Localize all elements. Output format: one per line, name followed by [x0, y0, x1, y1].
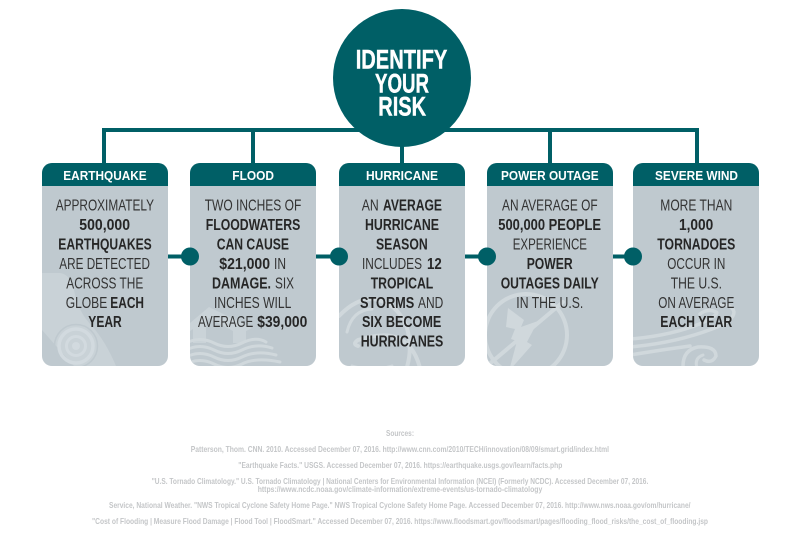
- sources: "U.S. Tornado Climatology." U.S. Tornado Climatology | National Centers for Environmental Information (NCEI) (Formerly NCDC). Accessed December 07, 2016.: [152, 476, 648, 486]
- icon: wind gusts: [630, 305, 734, 368]
- header: power outage: POWER OUTAGE: [501, 169, 599, 183]
- text: earthquake fact: EARTHQUAKES: [58, 237, 152, 254]
- text: hurricane fact: SEASON: [376, 237, 428, 254]
- text: flood fact: TWO INCHES OF: [205, 198, 301, 215]
- sources: Patterson, Thom. CNN. 2010. Accessed December 07, 2016. http://www.cnn.com/2010/TECH/innovation/08/09/smart.grid/index.html: [191, 444, 609, 454]
- text: flood fact: INCHES WILL: [214, 295, 291, 312]
- text: flood fact: SIX: [275, 275, 294, 292]
- text: severe wind fact: [657, 198, 736, 331]
- text: hurricane fact: AND: [418, 295, 443, 312]
- text: earthquake fact: APPROXIMATELY: [56, 198, 154, 215]
- header: hurricane: HURRICANE: [366, 169, 438, 183]
- text: severe wind fact: THE U.S.: [671, 275, 722, 292]
- icon: earthquake rings: [42, 273, 116, 368]
- header: severe wind: SEVERE WIND: [655, 169, 738, 183]
- text: hurricane fact: HURRICANE: [365, 217, 439, 234]
- text: earthquake fact: GLOBE: [66, 295, 107, 312]
- text: severe wind fact: OCCUR IN: [667, 256, 725, 273]
- icon: hurricane swirl: [339, 299, 420, 370]
- text: hurricane fact: [360, 198, 444, 351]
- icon: lightning in crossed circle: [485, 294, 567, 376]
- text: hurricane fact: HURRICANES: [361, 334, 444, 351]
- text: power outage fact: AN AVERAGE OF: [502, 198, 598, 215]
- icon: flooded house: [186, 307, 280, 368]
- header: severe wind: [633, 163, 759, 186]
- text: hurricane fact: STORMS: [360, 295, 415, 312]
- header: earthquake: [42, 163, 168, 186]
- org chart connector lines: [102, 128, 699, 164]
- sources: "Earthquake Facts." USGS. Accessed December 07, 2016. https://earthquake.usgs.gov/learn/facts.php: [238, 460, 562, 470]
- text: earthquake fact: [56, 198, 154, 331]
- text: severe wind fact: 1,000: [679, 217, 713, 234]
- header: hurricane: [339, 163, 465, 186]
- text: hurricane fact: TROPICAL: [371, 275, 433, 292]
- text: flood fact: [198, 198, 307, 331]
- text: earthquake fact: EACH: [110, 295, 144, 312]
- panel connectors with dots: [168, 248, 642, 266]
- text: hurricane fact: AVERAGE: [383, 198, 442, 215]
- text: severe wind fact: ON AVERAGE: [658, 295, 734, 312]
- panel: severe wind: [630, 163, 759, 368]
- text: hurricane fact: AN: [362, 198, 379, 215]
- title circle: IDENTIFY: [356, 44, 448, 74]
- text: flood fact: DAMAGE.: [212, 275, 271, 292]
- text: power outage fact: [498, 198, 601, 312]
- text: hurricane fact: 12: [427, 256, 442, 273]
- title circle: [333, 9, 471, 147]
- text: power outage fact: IN THE U.S.: [516, 295, 583, 312]
- header: power outage: [487, 163, 613, 186]
- text: flood fact: $39,000: [257, 314, 307, 331]
- header: flood: [190, 163, 316, 186]
- text: power outage fact: POWER: [527, 256, 573, 273]
- title circle: YOUR: [375, 68, 429, 98]
- sources: [92, 428, 708, 526]
- text: flood fact: CAN CAUSE: [217, 237, 289, 254]
- header: flood: FLOOD: [232, 169, 274, 183]
- text: flood fact: IN: [274, 256, 286, 273]
- text: severe wind fact: TORNADOES: [657, 237, 736, 254]
- text: severe wind fact: EACH YEAR: [660, 314, 733, 331]
- text: earthquake fact: ARE DETECTED: [59, 256, 150, 273]
- text: flood fact: FLOODWATERS: [206, 217, 301, 234]
- text: hurricane fact: INCLUDES: [362, 256, 422, 273]
- panel: earthquake: [42, 163, 168, 368]
- text: earthquake fact: YEAR: [88, 314, 122, 331]
- text: earthquake fact: 500,000: [79, 217, 130, 234]
- title circle: RISK: [378, 92, 426, 122]
- panel: hurricane: [339, 163, 465, 370]
- sources: https://www.ncdc.noaa.gov/climate-information/extreme-events/us-tornado-climatology: [258, 484, 543, 494]
- text: severe wind fact: MORE THAN: [660, 198, 732, 215]
- text: flood fact: $21,000: [219, 256, 270, 273]
- text: power outage fact: OUTAGES DAILY: [501, 275, 599, 292]
- sources: Sources:: [386, 428, 414, 438]
- panel: flood: [186, 163, 316, 368]
- text: flood fact: AVERAGE: [198, 314, 253, 331]
- text: earthquake fact: ACROSS THE: [66, 275, 143, 292]
- panel: power outage: [485, 163, 613, 376]
- text: hurricane fact: SIX BECOME: [362, 314, 442, 331]
- text: power outage fact: EXPERIENCE: [513, 237, 587, 254]
- header: earthquake: EARTHQUAKE: [63, 169, 147, 183]
- text: power outage fact: 500,000 PEOPLE: [498, 217, 601, 234]
